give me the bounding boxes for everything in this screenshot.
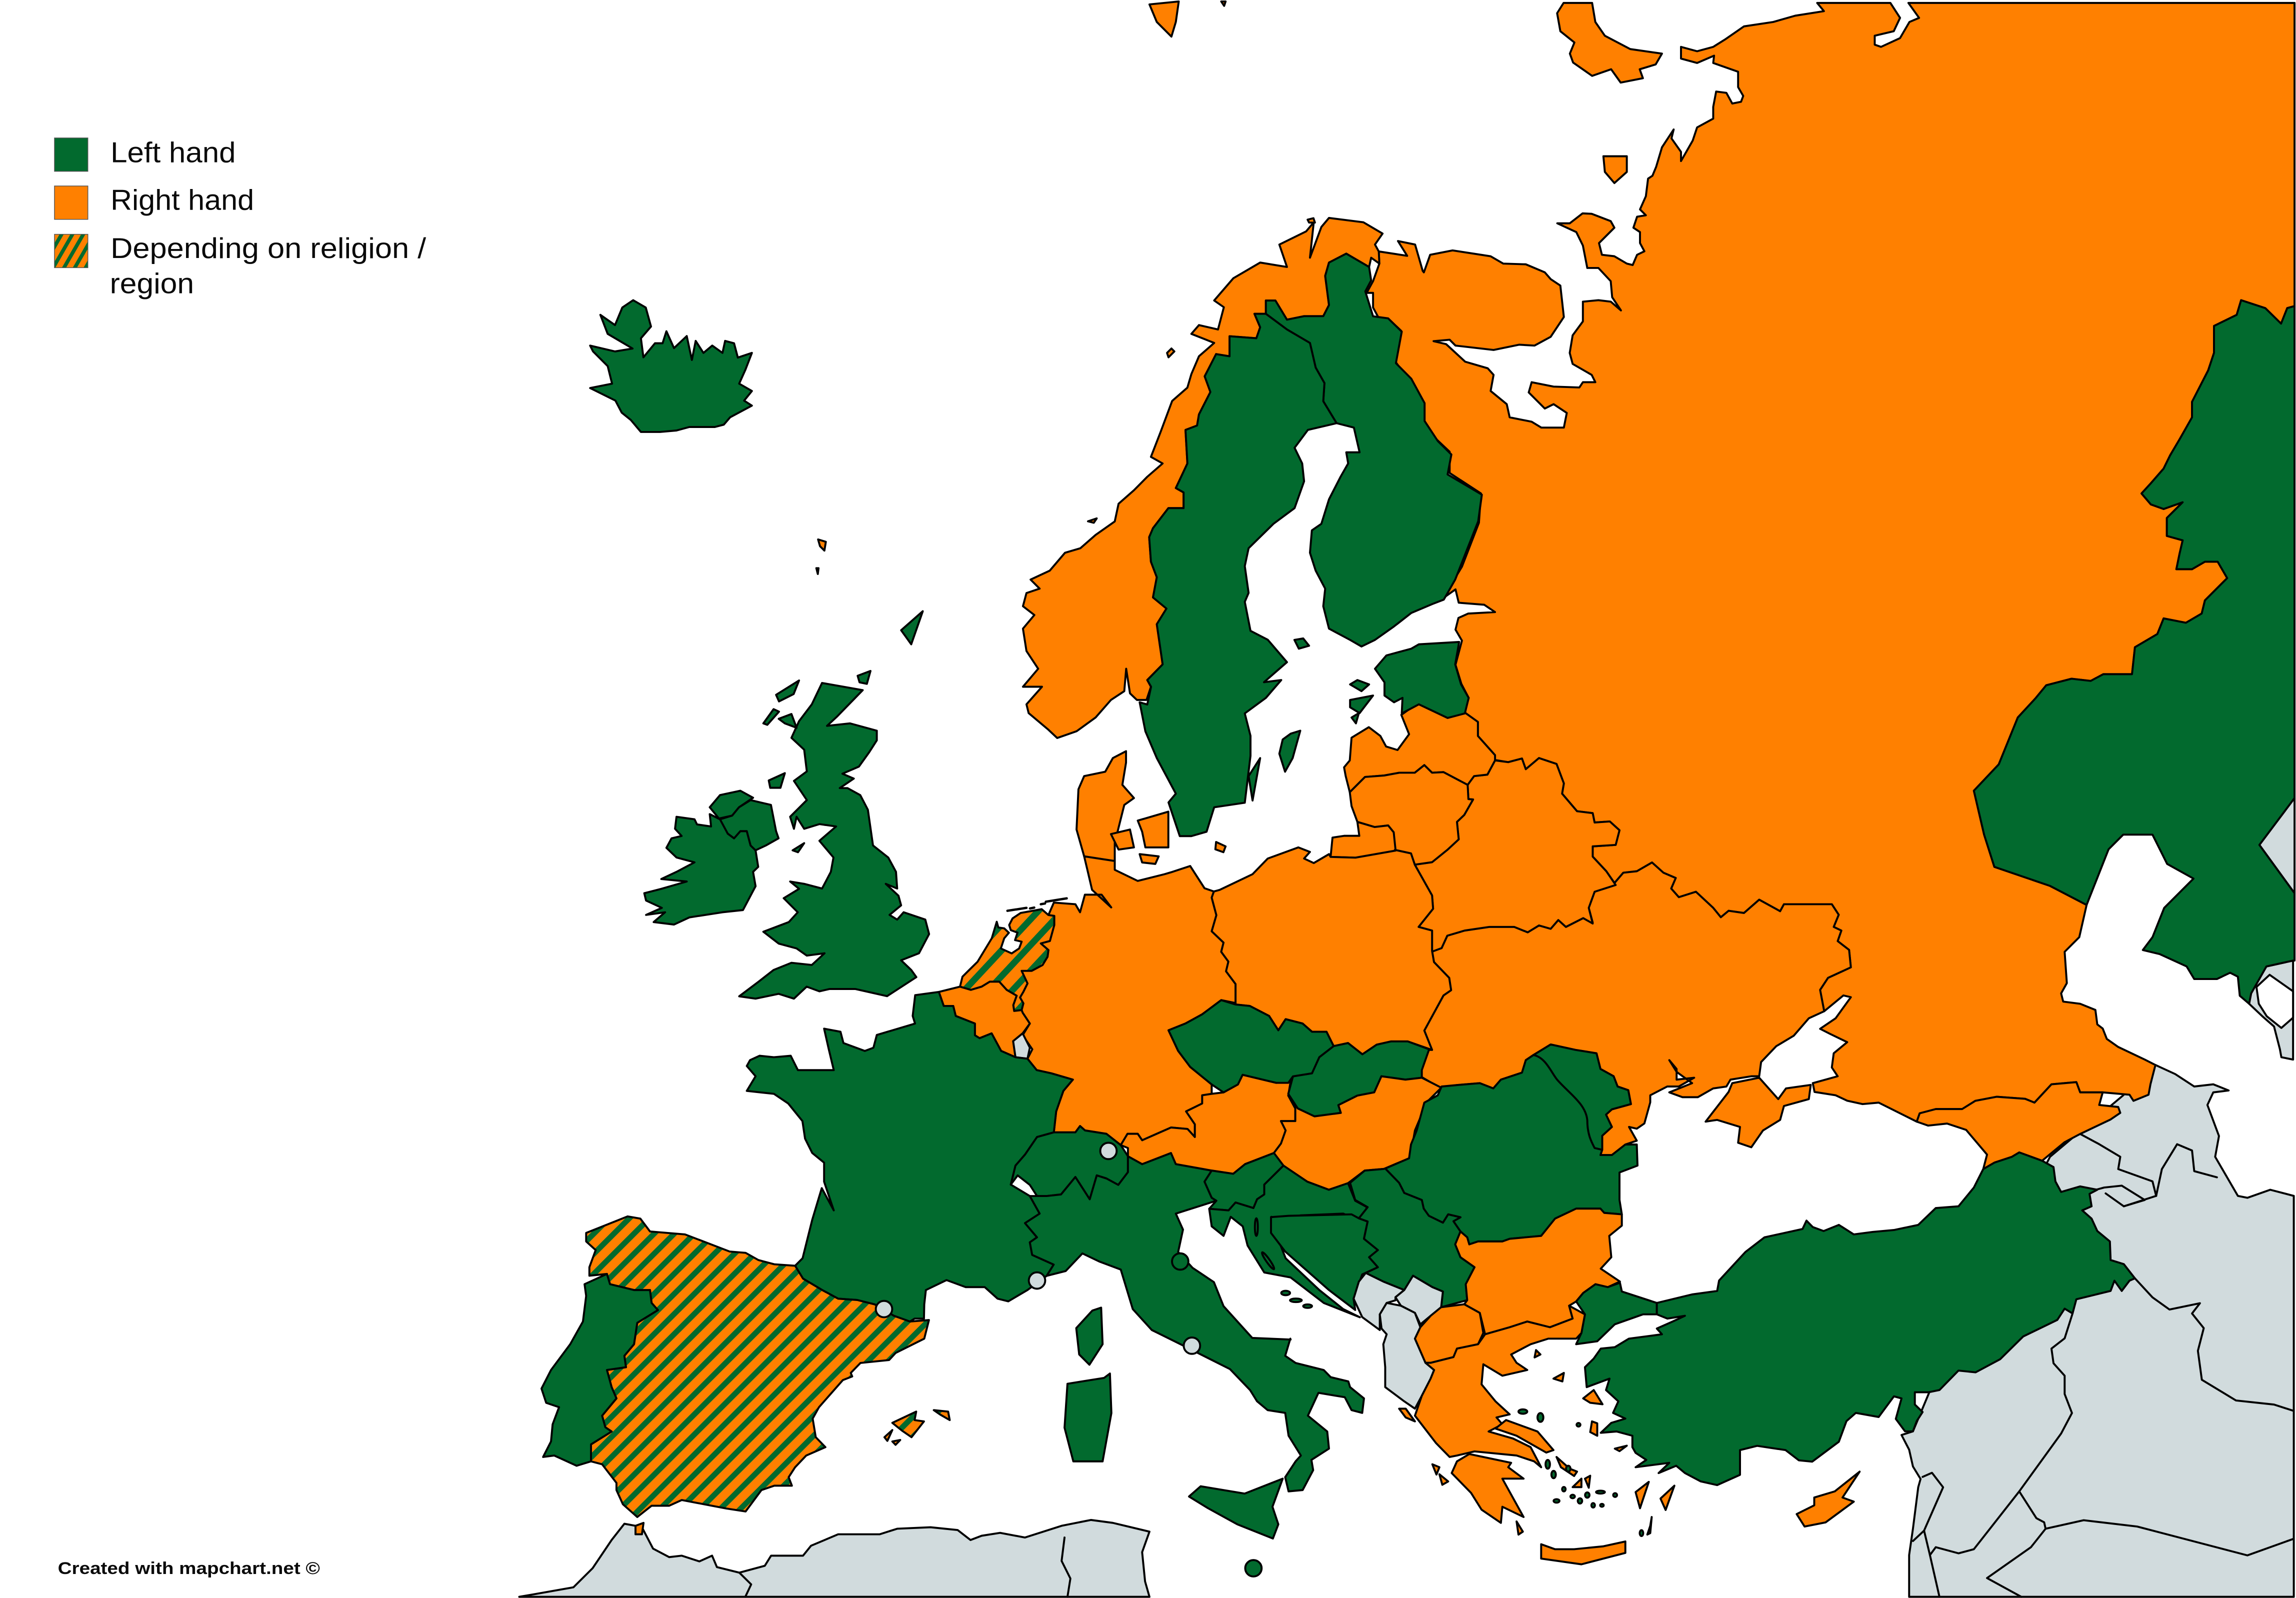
Malta marker <box>1245 1560 1262 1576</box>
North Africa <box>519 1520 1150 1597</box>
Hungary <box>1274 1076 1442 1190</box>
Norway <box>1023 218 1382 738</box>
Cyprus <box>1796 1472 1860 1526</box>
legend <box>54 137 426 300</box>
legend swatch: depending on religion or region <box>54 234 88 268</box>
Switzerland <box>1011 1126 1128 1200</box>
non-data countries: Middle East and Caucasus <box>1902 1065 2294 1597</box>
Andorra marker <box>876 1301 892 1318</box>
Lithuania <box>1350 765 1473 864</box>
Portugal <box>542 1274 658 1466</box>
Bulgaria <box>1455 1208 1622 1334</box>
Ceuta <box>636 1523 644 1534</box>
Kaliningrad <box>1330 822 1396 858</box>
Georgia <box>1917 1082 2120 1169</box>
Belarus <box>1415 758 1620 952</box>
Italy <box>1025 1153 1364 1538</box>
Netherlands: striped <box>960 898 1066 1011</box>
Crimea <box>1706 1078 1810 1148</box>
legend label: right hand: Right hand <box>110 184 254 216</box>
Albania <box>1380 1303 1434 1408</box>
San Marino marker <box>1172 1254 1188 1270</box>
Northern Ireland <box>720 800 778 850</box>
Poland <box>1212 848 1451 1054</box>
Sweden <box>1140 314 1336 836</box>
Greece <box>1399 1306 1674 1564</box>
Kosovo <box>1396 1276 1443 1324</box>
Ireland <box>644 790 758 924</box>
Germany <box>1020 856 1236 1145</box>
Russia <box>1150 2 2294 1122</box>
attribution: Created with mapchart.net © <box>58 1559 320 1578</box>
legend label: left hand: Left hand <box>110 137 236 169</box>
Turkey, European part <box>1576 1282 1657 1344</box>
Croatia <box>1209 1166 1367 1318</box>
France <box>747 992 1102 1364</box>
Austria <box>1121 1075 1296 1174</box>
Slovakia <box>1288 1042 1429 1116</box>
Bosnia and Herzegovina <box>1271 1214 1378 1310</box>
legend label: depending on religion or region: Depending on religion / <box>110 232 426 264</box>
Liechtenstein marker <box>1100 1142 1116 1159</box>
Turkey, Anatolia <box>1585 1152 2135 1485</box>
non-data countries: Central Asia <box>2249 798 2294 1060</box>
Czechia <box>1168 1000 1334 1092</box>
Ukraine <box>1420 862 1851 1155</box>
Faroe Islands <box>816 540 826 574</box>
Vatican marker <box>1184 1338 1200 1354</box>
Iceland <box>590 300 752 432</box>
small Aegean and Adriatic islands <box>1255 1218 1643 1536</box>
North Macedonia <box>1415 1304 1484 1363</box>
Denmark <box>1076 751 1226 864</box>
Romania and Moldova <box>1385 1044 1638 1244</box>
Great Britain <box>739 611 929 998</box>
map of Europe <box>519 2 2294 1597</box>
Latvia <box>1344 702 1495 792</box>
Montenegro <box>1354 1273 1404 1330</box>
Finland <box>1266 254 1482 646</box>
Belgium <box>939 982 1030 1057</box>
legend label: second line: region <box>110 268 194 300</box>
Estonia <box>1350 642 1468 724</box>
Luxembourg <box>1013 1034 1030 1058</box>
Serbia <box>1350 1168 1474 1307</box>
Spain: striped <box>586 1216 950 1517</box>
legend swatch: left hand <box>54 138 88 172</box>
microstate markers <box>876 1142 1262 1576</box>
legend swatch: right hand <box>54 186 88 220</box>
Kazakhstan <box>1974 300 2294 1004</box>
Monaco marker <box>1029 1272 1045 1288</box>
Slovenia <box>1204 1153 1284 1210</box>
